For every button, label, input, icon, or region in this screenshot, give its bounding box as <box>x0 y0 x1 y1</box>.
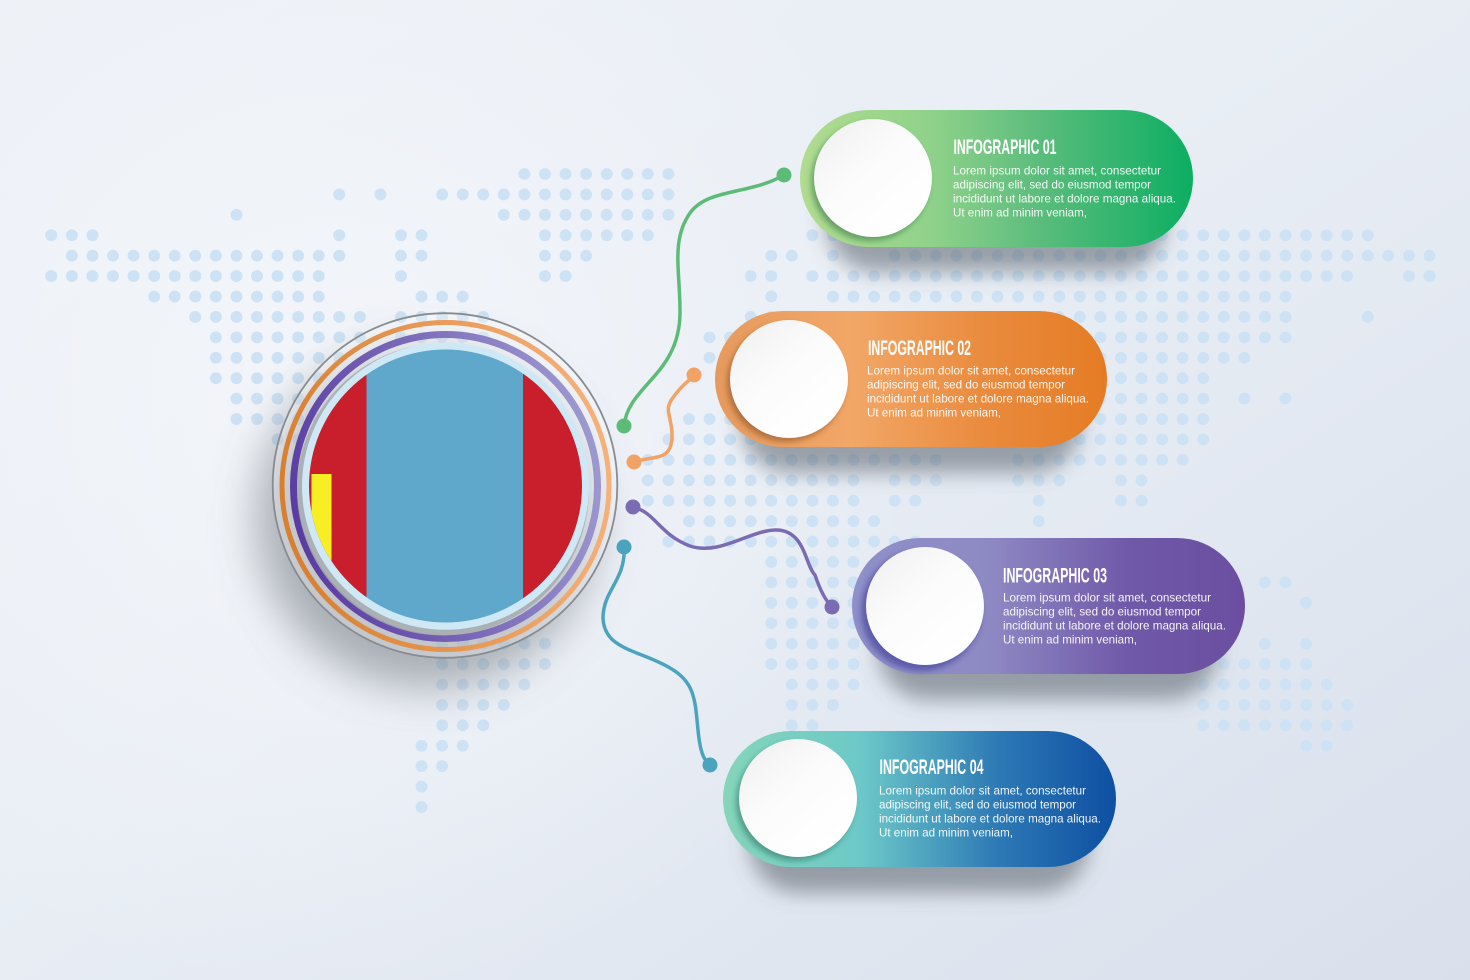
body text: Ut enim ad minim veniam, <box>953 206 1087 220</box>
card: infographic 02 <box>715 311 1107 473</box>
body text: Lorem ipsum dolor sit amet, consectetur <box>953 164 1161 178</box>
flag of Mongolia <box>305 345 585 630</box>
connector: green <box>616 168 792 434</box>
ring: grey inner bevel <box>297 344 589 636</box>
white circle <box>739 739 857 857</box>
body text: incididunt ut labore et dolore magna aliqua. <box>879 812 1101 826</box>
body text: Ut enim ad minim veniam, <box>1003 632 1137 646</box>
card pill <box>723 731 1116 867</box>
card pill <box>715 311 1107 447</box>
connector: purple <box>626 500 840 614</box>
body text: Ut enim ad minim veniam, <box>879 826 1013 840</box>
card shadow <box>878 574 1218 700</box>
card pill <box>852 538 1245 674</box>
card pill <box>800 110 1193 247</box>
card: infographic 01 <box>800 110 1193 272</box>
body text <box>1003 590 1226 646</box>
body text: Lorem ipsum dolor sit amet, consectetur <box>879 784 1086 798</box>
body text: Lorem ipsum dolor sit amet, consectetur <box>867 364 1075 378</box>
body text: Ut enim ad minim veniam, <box>867 406 1001 420</box>
card shadow <box>741 347 1081 473</box>
heading: INFOGRAPHIC 03 <box>1003 565 1107 588</box>
connector: teal <box>603 540 718 772</box>
card: infographic 04 <box>723 731 1116 893</box>
body text <box>867 364 1089 420</box>
body text: incididunt ut labore et dolore magna aliqua. <box>867 392 1089 406</box>
circle shadow <box>811 123 929 241</box>
heading: INFOGRAPHIC 04 <box>880 756 984 779</box>
body text: adipiscing elit, sed do eiusmod tempor <box>1003 604 1201 618</box>
white circle <box>730 320 848 438</box>
heading: INFOGRAPHIC 01 <box>954 136 1057 159</box>
connector: orange <box>626 368 702 470</box>
circle shadow <box>861 551 981 671</box>
card shadow <box>826 146 1166 272</box>
body text <box>953 164 1176 220</box>
circle shadow <box>736 743 854 861</box>
ring: purple <box>294 334 598 638</box>
body text <box>879 784 1101 840</box>
card: infographic 03 <box>852 538 1245 700</box>
white circle <box>866 547 984 665</box>
body text: incididunt ut labore et dolore magna aliqua. <box>1003 618 1226 632</box>
body text: adipiscing elit, sed do eiusmod tempor <box>867 378 1065 392</box>
shadow: flag badge <box>256 348 596 688</box>
ring: light blue <box>302 343 589 630</box>
body text: adipiscing elit, sed do eiusmod tempor <box>879 798 1076 812</box>
body text: Lorem ipsum dolor sit amet, consectetur <box>1003 590 1211 604</box>
white circle <box>814 119 932 237</box>
body text: adipiscing elit, sed do eiusmod tempor <box>953 178 1151 192</box>
heading: INFOGRAPHIC 02 <box>868 337 971 360</box>
body text: incididunt ut labore et dolore magna aliqua. <box>953 192 1176 206</box>
dotted world map <box>51 174 1430 807</box>
ring: outer grey <box>273 313 617 658</box>
circle shadow <box>727 324 845 442</box>
card shadow <box>749 767 1089 893</box>
ring: orange <box>282 322 609 650</box>
flag badge <box>273 313 617 658</box>
